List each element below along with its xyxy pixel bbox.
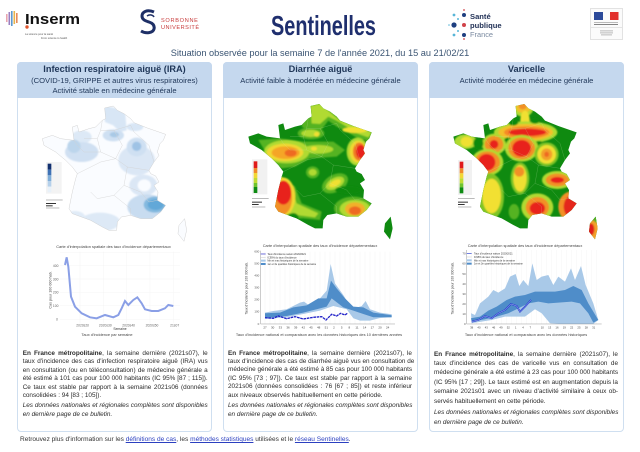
chart: diarrhée incidence: 39 bbox=[294, 326, 298, 330]
chart: diarrhée incidence: 2 bbox=[333, 326, 335, 330]
panel: Varicelle bbox=[429, 62, 624, 432]
north band bbox=[301, 104, 372, 142]
chart: diarrhée incidence: 17 bbox=[371, 326, 374, 330]
chart: IRA incidence: 2020s20 bbox=[76, 323, 89, 327]
chart: IRA incidence: 300 bbox=[53, 277, 59, 281]
chart legend: Taux d'incidence saison 2020/2021 bbox=[474, 253, 513, 256]
chart: IRA incidence: Semaine bbox=[113, 327, 127, 331]
text block: Varicelle: servés habituellement en cette période. bbox=[434, 398, 546, 404]
text block: IRA bbox=[22, 350, 208, 418]
chart: diarrhée incidence: 0 bbox=[258, 322, 260, 326]
chart: diarrhée incidence: 8 bbox=[348, 326, 350, 330]
chart: diarrhée incidence: 400 bbox=[254, 274, 260, 278]
south hotspots bbox=[521, 193, 553, 221]
heading: Diarrhée aiguë: Activité faible à modérée en médecine générale bbox=[240, 76, 401, 84]
chart: varicelle incidence: 22 bbox=[570, 326, 574, 330]
chart: IRA incidence: 2020s50 bbox=[146, 323, 159, 327]
text block: Varicelle bbox=[434, 350, 618, 426]
chart: varicelle incidence: 10 bbox=[541, 326, 544, 330]
chart: diarrhée incidence: 33 bbox=[279, 326, 282, 330]
chart: diarrhée incidence: 100 bbox=[254, 310, 260, 314]
text block: Diarrhée: médecine générale a été estimé à 85 cas pour 100 000 habitants bbox=[228, 366, 412, 373]
map legend bbox=[458, 160, 475, 207]
chart: varicelle incidence: 30 bbox=[462, 292, 466, 296]
Paris hotspot bbox=[505, 135, 538, 162]
chart: IRA incidence: 2020s30 bbox=[99, 323, 112, 327]
chart: varicelle incidence: 46 bbox=[492, 326, 496, 330]
chart legend: Taux d'incidence saison 2020/2021 bbox=[267, 253, 307, 256]
Aquitaine bbox=[480, 173, 505, 217]
chart: varicelle incidence: 25 bbox=[577, 326, 581, 330]
chart: varicelle incidence: 0 bbox=[464, 322, 466, 326]
text block: Varicelle: médecine générale a été estimé à 23 cas pour 100 000 habitants bbox=[434, 369, 618, 376]
logo: Santé publique France: publique bbox=[470, 21, 502, 30]
text block: Diarrhée: Les données nationales et régionales complètes sont disponibles bbox=[228, 402, 412, 409]
chart: varicelle incidence: 1 bbox=[515, 326, 517, 330]
heading: Diarrhée aiguë bbox=[223, 62, 418, 98]
logo: Sorbonne Université: SORBONNE bbox=[161, 18, 199, 24]
chart: IRA incidence: 21s07 bbox=[170, 323, 179, 327]
chart legend: Min et max historiques de la semaine bbox=[474, 259, 516, 262]
text block: IRA: consolidées : 94 [83 ; 105]). bbox=[23, 392, 101, 399]
chart legend bbox=[261, 253, 317, 266]
chart: varicelle incidence: 50 bbox=[462, 272, 466, 276]
chart legend: IC95% du taux d'incidence bbox=[474, 256, 504, 259]
text block: Varicelle: taux d'incidence des cas de varicelle vus en consultation de bbox=[434, 360, 618, 367]
chart: diarrhée incidence: 500 bbox=[254, 262, 260, 266]
chart: diarrhée incidence: Taux d'incidence pour 100 000 hab. bbox=[245, 262, 249, 315]
logo: Sorbonne Université bbox=[140, 9, 200, 34]
chart legend: IC95% du taux d'incidence bbox=[267, 256, 297, 259]
text block: IRA: Ce taux est stable par rapport à la semaine 2021s06 (données bbox=[23, 384, 208, 391]
chart: IRA incidence: 100 bbox=[53, 304, 59, 308]
Vendée hotspot bbox=[471, 149, 503, 176]
heading: Diarrhée aiguë: Diarrhée aiguë bbox=[289, 64, 352, 74]
text block: IRA: taux d'incidence des cas d'infection respiratoire aiguë (IRA) vus bbox=[23, 358, 208, 365]
chart: diarrhée incidence: 24 bbox=[386, 326, 390, 330]
chart: diarrhée incidence: 36 bbox=[286, 326, 290, 330]
footer note: Retrouvez plus d'information sur les définitions de cas, les méthodes statistiques utilisées et le réseau Sentinelles. bbox=[20, 436, 351, 443]
heading: Varicelle: Activité modérée en médecine générale bbox=[460, 76, 593, 84]
chart: diarrhée incidence: 300 bbox=[254, 286, 260, 290]
chart: varicelle incidence: 4 bbox=[522, 326, 524, 330]
chart: IRA incidence: Cas pour 100 000 hab. bbox=[49, 271, 53, 309]
text block: Diarrhée bbox=[228, 350, 414, 418]
chart legend: 1er et 3e quartiles historiques de la semaine bbox=[267, 263, 317, 266]
text block: IRA: en consultation (ou en téléconsultation) de médecine générale a bbox=[23, 367, 208, 374]
chart legend: Min et max historiques de la semaine bbox=[267, 260, 309, 263]
centre hotspot bbox=[511, 162, 529, 194]
chart: varicelle incidence: 38 bbox=[470, 326, 474, 330]
title: Situation observée pour la semaine 7 de l'année 2021, du 15 au 21/02/21 bbox=[171, 48, 469, 58]
north hotspots bbox=[516, 106, 534, 118]
Brittany bbox=[454, 134, 477, 149]
chart: diarrhée incidence: 48 bbox=[317, 326, 321, 330]
text block: IRA: été estimé à 101 cas pour 100 000 habitants (IC 95% [87 ; 115]). bbox=[23, 375, 208, 382]
chart: diarrhée incidence: 51 bbox=[325, 326, 328, 330]
heading: IRA: Activité stable en médecine générale bbox=[52, 86, 177, 94]
chart: diarrhée incidence bbox=[245, 250, 395, 330]
text block: Diarrhée: 2021s06 (données consolidées : 76 [67 ; 85]) et reste inférieur bbox=[228, 383, 412, 390]
text block: IRA: en dernière page de ce bulletin. bbox=[23, 411, 112, 418]
text block: Varicelle: Les données nationales et régionales complètes sont disponibles bbox=[434, 408, 618, 416]
chart: IRA incidence: 400 bbox=[53, 264, 59, 268]
chart: varicelle incidence: 43 bbox=[485, 326, 488, 330]
panel: IRA bbox=[17, 62, 212, 432]
chart: varicelle incidence: 7 bbox=[530, 326, 532, 330]
chart caption: IRA: Taux d'incidence par semaine bbox=[81, 332, 133, 337]
map: IRA bbox=[42, 106, 187, 242]
heading: IRA: Infection respiratoire aiguë (IRA) bbox=[43, 64, 186, 74]
chart: varicelle incidence: 60 bbox=[462, 261, 466, 265]
logo: République française bbox=[590, 8, 623, 40]
text block: Diarrhée: aux niveaux observés habituellement en cette période. bbox=[228, 392, 383, 398]
chart: diarrhée incidence: 600 bbox=[254, 250, 260, 254]
text block: IRA: En France métropolitaine, la semaine dernière (2021s07), le bbox=[23, 350, 208, 357]
chart: varicelle incidence: Taux d'incidence pour 100 000 hab. bbox=[451, 262, 455, 315]
chart: diarrhée incidence: 14 bbox=[363, 326, 367, 330]
chart: varicelle incidence: 31 bbox=[592, 326, 596, 330]
chart: IRA incidence bbox=[49, 252, 180, 331]
text block: Diarrhée: en dernière page de ce bulletin. bbox=[228, 410, 318, 418]
west band bbox=[258, 138, 345, 168]
Champagne hotspot bbox=[535, 142, 559, 166]
chart: varicelle incidence: 19 bbox=[563, 326, 566, 330]
logo: Inserm: La science pour la santé bbox=[25, 32, 54, 36]
text block: Varicelle: semaine 2021s01 avec un niveau d'activité similaire à ceux ob- bbox=[434, 388, 618, 395]
chart caption: varicelle: Taux d'incidence national et comparaison avec les données historiques bbox=[465, 332, 587, 337]
chart: IRA incidence: 0 bbox=[56, 317, 58, 321]
chart: varicelle incidence: 28 bbox=[585, 326, 588, 330]
chart: varicelle incidence: 16 bbox=[555, 326, 559, 330]
chart: diarrhée incidence: 5 bbox=[341, 326, 343, 330]
charts and maps bbox=[42, 104, 602, 337]
text block: Varicelle: (IC 95% [17 ; 29]). Le taux estimé est en augmentation depuis la bbox=[434, 378, 618, 386]
south-west bbox=[281, 176, 322, 221]
logo: Santé publique France: France bbox=[470, 30, 493, 39]
chart: varicelle incidence: 40 bbox=[462, 282, 466, 286]
map caption: IRA: Carte d'interpolation spatiale des taux d'incidence départementaux bbox=[56, 244, 171, 249]
map: diarrhée bbox=[248, 104, 393, 240]
logo: Inserm: From science to health bbox=[41, 36, 68, 40]
chart: diarrhée incidence: 27 bbox=[263, 326, 267, 330]
chart caption: diarrhée: Taux d'incidence national et comparaison avec les données historiques des 10 dernières années bbox=[236, 332, 402, 337]
heading: Varicelle: Varicelle bbox=[508, 64, 545, 74]
heading: Varicelle bbox=[429, 62, 624, 98]
map caption: varicelle: Carte d'interpolation spatiale des taux d'incidence départementaux bbox=[468, 243, 582, 248]
chart: varicelle incidence: 52 bbox=[507, 326, 510, 330]
chart: varicelle incidence: 70 bbox=[462, 251, 466, 255]
chart: varicelle incidence: 20 bbox=[462, 302, 466, 306]
panel: Diarrhée aiguë bbox=[223, 62, 418, 432]
text block: Diarrhée: En France métropolitaine, la semaine dernière (2021s07), le bbox=[228, 350, 412, 356]
chart: diarrhée incidence: 42 bbox=[302, 326, 305, 330]
chart: diarrhée incidence: 30 bbox=[271, 326, 275, 330]
Normandy hotspot bbox=[482, 134, 506, 155]
text block: Diarrhée: (IC 95% [73 ; 97]). Ce taux est stable par rapport à la semaine bbox=[228, 375, 412, 382]
chart: diarrhée incidence: 20 bbox=[378, 326, 382, 330]
map: varicelle bbox=[453, 104, 598, 240]
logo: Santé publique France bbox=[448, 9, 502, 40]
logo: Sorbonne Université: UNIVERSITÉ bbox=[161, 24, 200, 31]
map caption: diarrhée: Carte d'interpolation spatiale des taux d'incidence départementaux bbox=[263, 243, 377, 248]
Alps hotspot bbox=[542, 171, 573, 189]
chart: diarrhée incidence: 11 bbox=[355, 326, 359, 330]
heading: IRA bbox=[17, 62, 212, 98]
south-east bbox=[334, 197, 373, 220]
chart: diarrhée incidence: 45 bbox=[309, 326, 313, 330]
chart: IRA incidence: 200 bbox=[53, 291, 59, 295]
logo: Inserm: Inserm bbox=[25, 11, 80, 28]
text block: Varicelle: En France métropolitaine, la semaine dernière (2021s07), le bbox=[434, 350, 618, 358]
chart: IRA incidence: 2020s40 bbox=[122, 323, 135, 327]
logo: Santé publique France: Santé bbox=[470, 12, 491, 21]
text block: IRA: Les données nationales et régionales complètes sont disponibles bbox=[23, 402, 208, 409]
chart legend bbox=[467, 253, 523, 266]
text block: Diarrhée: taux d'incidence des cas de diarrhée aiguë vus en consultation de bbox=[228, 358, 414, 365]
east hotspot bbox=[347, 138, 368, 166]
chart: varicelle incidence: 40 bbox=[477, 326, 481, 330]
chart: varicelle incidence: 13 bbox=[548, 326, 552, 330]
chart: varicelle incidence bbox=[451, 250, 602, 330]
centre bbox=[306, 166, 319, 178]
chart: varicelle incidence: 49 bbox=[499, 326, 503, 330]
map legend bbox=[252, 159, 269, 207]
heading: IRA: (COVID-19, GRIPPE et autres virus respiratoires) bbox=[31, 76, 198, 84]
text block: Varicelle: en dernière page de ce bulletin. bbox=[434, 418, 524, 426]
chart: diarrhée incidence: 200 bbox=[254, 298, 260, 302]
chart legend: 1er et 3e quartiles historiques de la semaine bbox=[474, 263, 523, 266]
logo: Inserm bbox=[6, 11, 80, 40]
map legend bbox=[46, 162, 63, 208]
chart: varicelle incidence: 10 bbox=[462, 312, 466, 316]
